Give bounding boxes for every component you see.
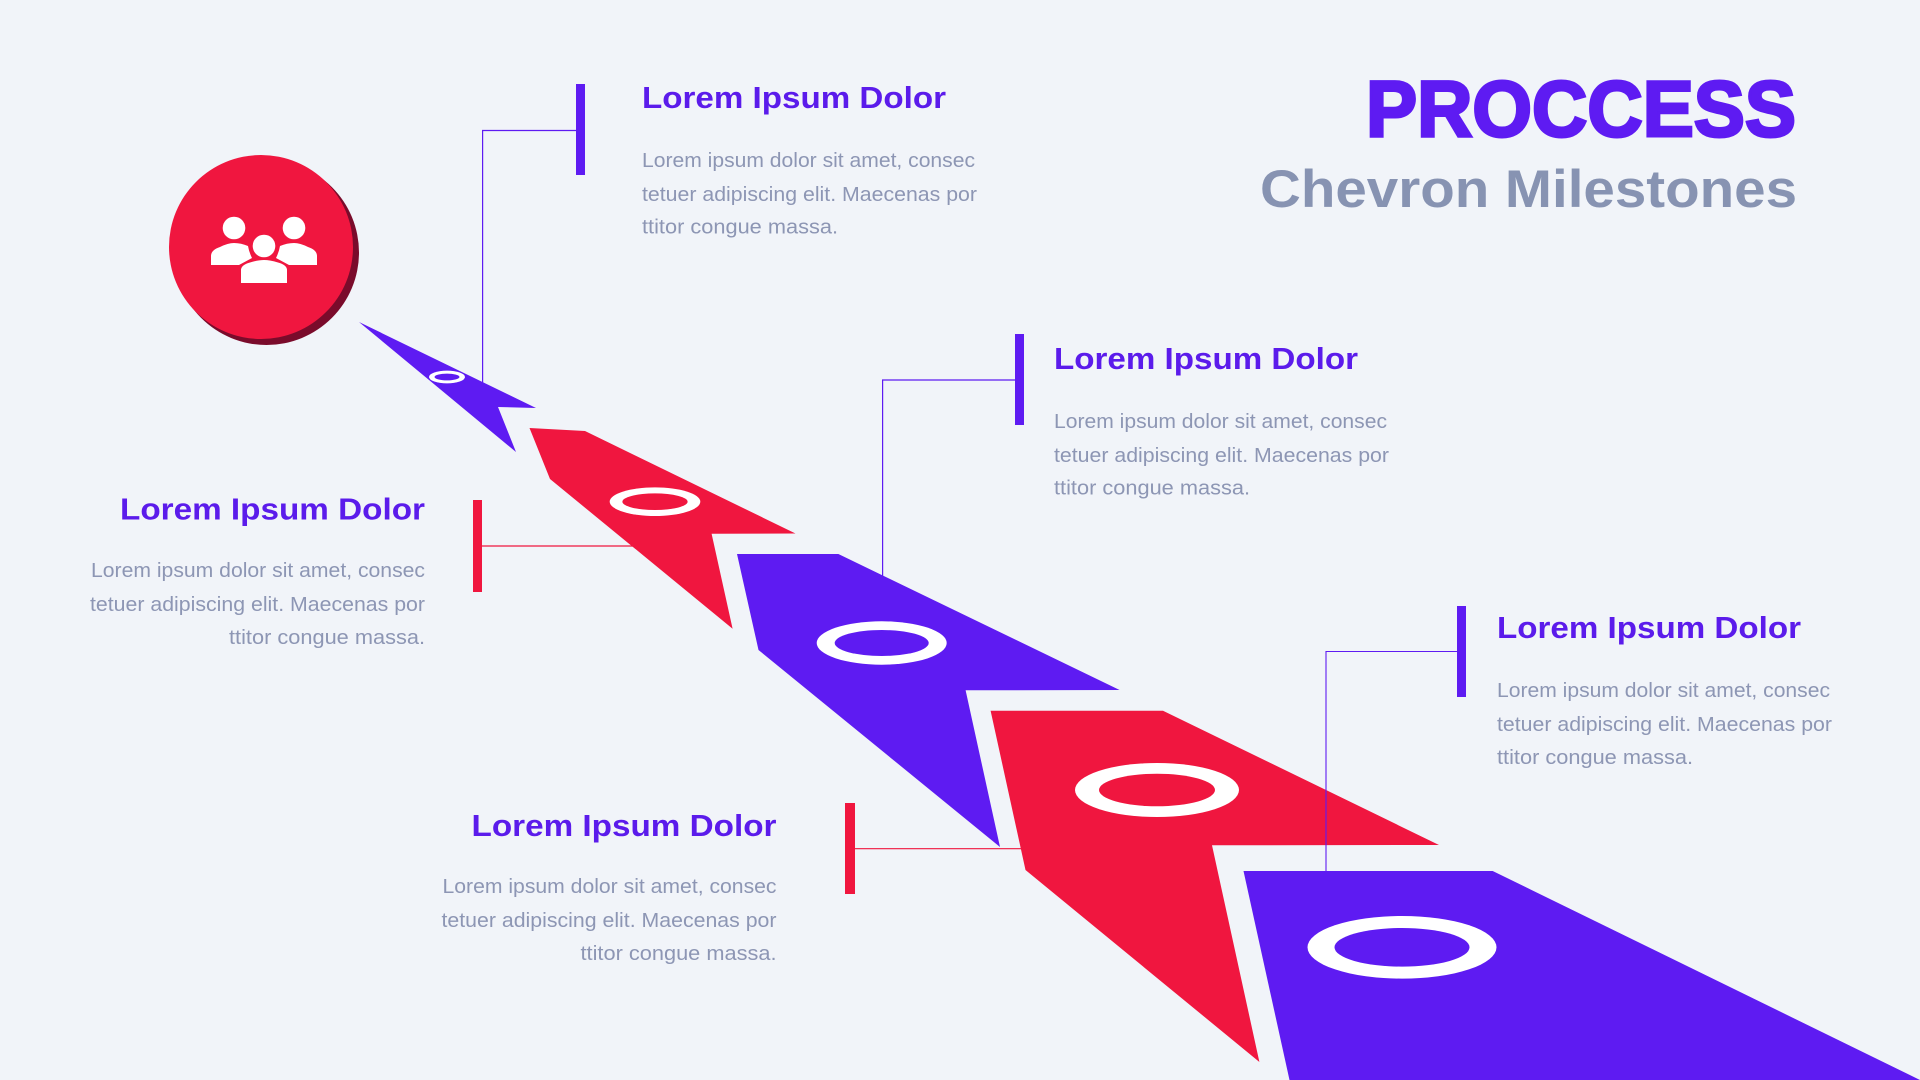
chevron 2 (530, 428, 796, 629)
ring marker 1 (429, 371, 465, 383)
ring marker 2 (610, 487, 700, 516)
callout: step 3: Lorem ipsum dolor sit amet, consec (1054, 410, 1387, 433)
callout: step 4: Lorem Ipsum Dolor (472, 808, 776, 843)
callout: step 1 (576, 80, 977, 238)
callout: step 5: tetuer adipiscing elit. Maecenas por (1497, 713, 1832, 736)
callout: step 3: ttitor congue massa. (1054, 476, 1250, 500)
subtitle: Chevron Milestones (1260, 160, 1797, 219)
callout: step 1: tetuer adipiscing elit. Maecenas por (642, 183, 977, 206)
connector: step 1 (483, 130, 576, 385)
callout: step 1: ttitor congue massa. (642, 216, 838, 238)
callout: step 4 (442, 803, 855, 965)
callout: step 2 (90, 492, 482, 649)
callout: step 4: Lorem ipsum dolor sit amet, consec (442, 875, 776, 898)
callout: step 4: ttitor congue massa. (580, 942, 776, 965)
callout: step 4: tetuer adipiscing elit. Maecenas por (442, 909, 777, 932)
callout: step 2: ttitor congue massa. (229, 626, 425, 649)
connector: step 5 (1326, 652, 1457, 871)
connector: step 2 (482, 545, 636, 547)
callout: step 1: Lorem Ipsum Dolor (642, 80, 946, 115)
connector: step 3 (883, 380, 1015, 580)
icon: people in red circle (169, 155, 359, 345)
ring marker 4 (1075, 763, 1239, 817)
ring marker 3 (817, 621, 947, 665)
callout: step 2: tetuer adipiscing elit. Maecenas por (90, 593, 425, 616)
callout: step 5: Lorem Ipsum Dolor (1497, 610, 1801, 645)
chevron 4 (991, 711, 1439, 1062)
callout: step 3: Lorem Ipsum Dolor (1054, 341, 1358, 376)
ring marker 5 (1308, 916, 1496, 979)
callout: step 1: Lorem ipsum dolor sit amet, consec (642, 149, 975, 172)
chevron 1 (359, 322, 536, 452)
callout: step 2: Lorem ipsum dolor sit amet, consec (91, 559, 425, 582)
callout: step 5: ttitor congue massa. (1497, 746, 1693, 769)
connector: step 4 (855, 848, 1023, 850)
chevron 3 (737, 554, 1120, 847)
title: PROCCESS (1366, 64, 1796, 153)
callout: step 3: tetuer adipiscing elit. Maecenas por (1054, 444, 1389, 467)
callout: step 5: Lorem ipsum dolor sit amet, consec (1497, 679, 1830, 702)
callout: step 2: Lorem Ipsum Dolor (120, 492, 425, 526)
callout: step 5 (1457, 606, 1832, 769)
callout: step 3 (1015, 334, 1389, 500)
chevron 5 (1244, 871, 1920, 1080)
